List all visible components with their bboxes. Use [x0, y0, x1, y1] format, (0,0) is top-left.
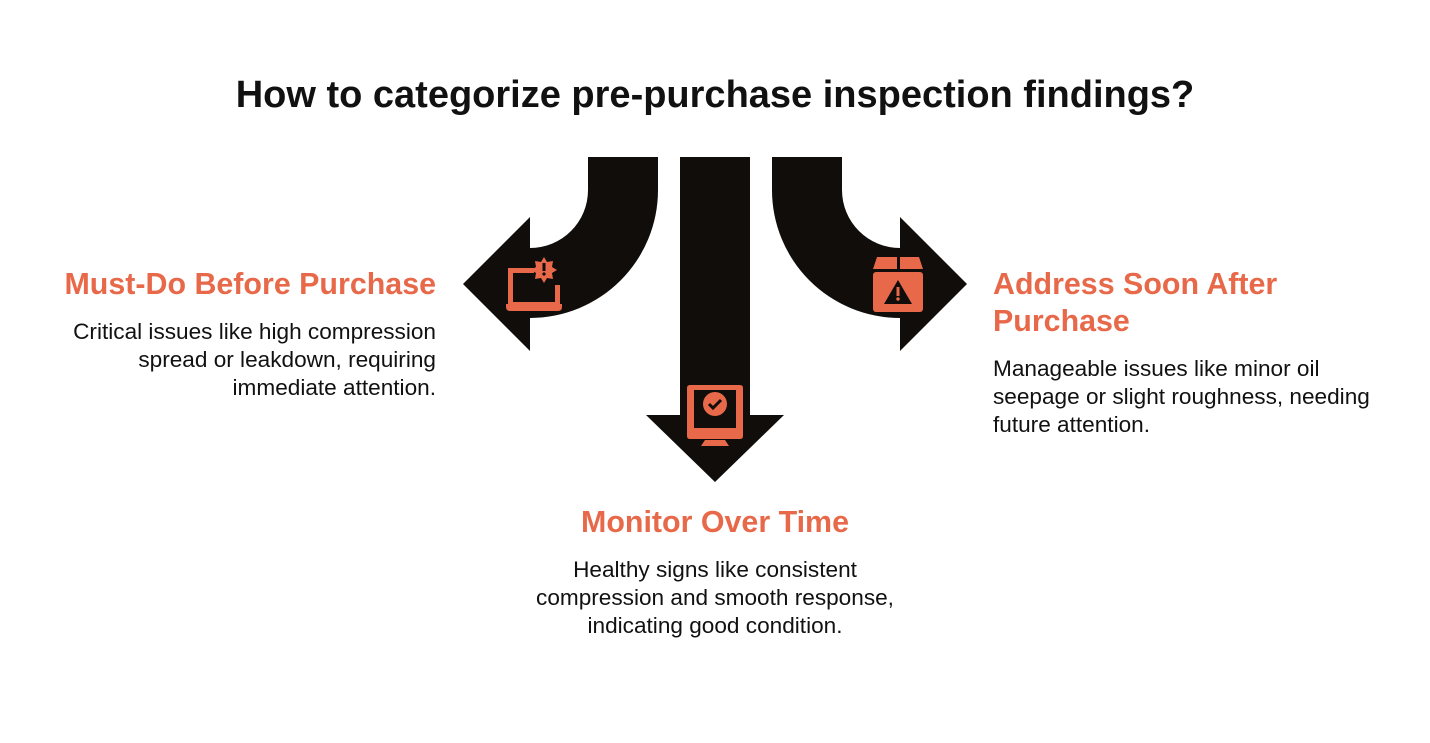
panel: address soon: [993, 267, 1370, 437]
text: address soon: [993, 356, 1370, 437]
heading: address soon: Address Soon After: [993, 267, 1277, 301]
heading: must-do: Must-Do Before Purchase: [64, 267, 436, 301]
text: must-do: immediate attention.: [233, 375, 436, 400]
text: address soon: future attention.: [993, 412, 1150, 437]
text: must-do: [73, 319, 436, 400]
heading: monitor: Monitor Over Time: [581, 505, 849, 539]
arrow: left: [463, 157, 658, 351]
icon: laptop alert: [506, 257, 562, 311]
text: monitor: Healthy signs like consistent: [573, 557, 857, 582]
icon: monitor check: [687, 385, 743, 446]
panel: monitor: [536, 505, 894, 638]
panel: must-do: [64, 267, 436, 400]
heading: address soon: Purchase: [993, 304, 1130, 338]
text: monitor: indicating good condition.: [588, 613, 842, 638]
text: address soon: seepage or slight roughness, needing: [993, 384, 1370, 409]
heading: address soon: [993, 267, 1277, 338]
title: How to categorize pre-purchase inspection findings?: [236, 74, 1194, 116]
icon: box warning: [873, 257, 923, 312]
text: address soon: Manageable issues like minor oil: [993, 356, 1320, 381]
text: must-do: Critical issues like high compression: [73, 319, 436, 344]
arrow: down: [646, 157, 784, 482]
text: must-do: spread or leakdown, requiring: [138, 347, 436, 372]
text: monitor: [536, 557, 894, 638]
arrow: right: [772, 157, 967, 351]
text: monitor: compression and smooth response,: [536, 585, 894, 610]
